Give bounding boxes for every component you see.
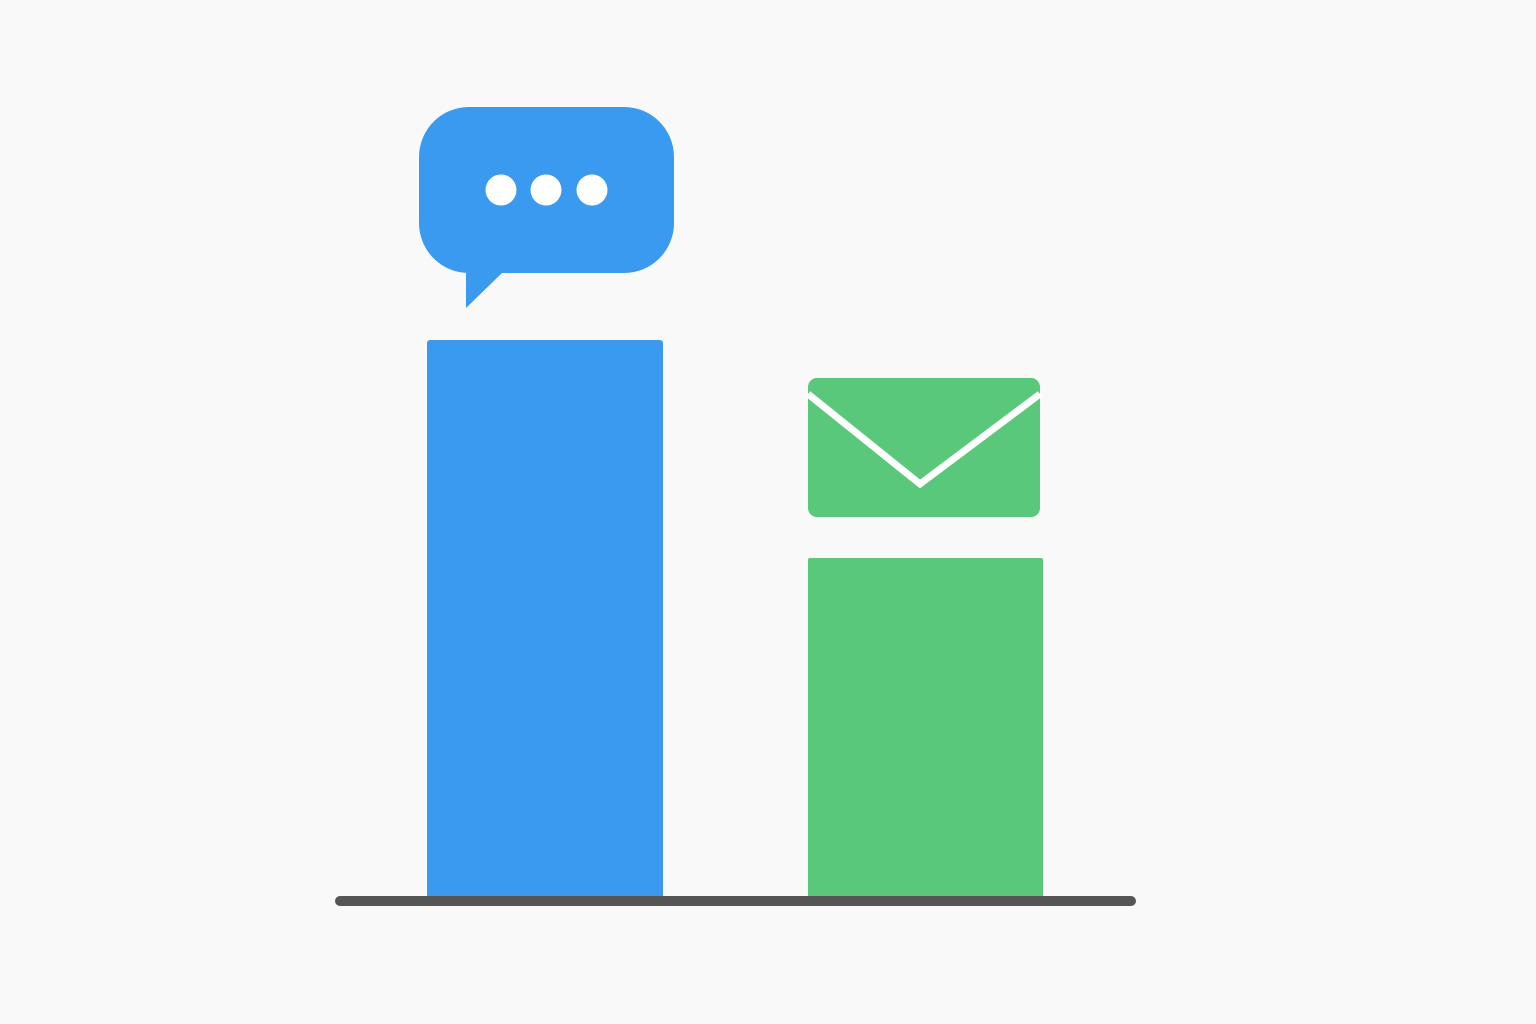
- bar: chat (blue): [427, 340, 663, 900]
- bar: email (green): [808, 558, 1043, 900]
- icon: speech bubble: [419, 107, 674, 308]
- icon: envelope: [808, 378, 1040, 517]
- baseline axis: [335, 896, 1136, 906]
